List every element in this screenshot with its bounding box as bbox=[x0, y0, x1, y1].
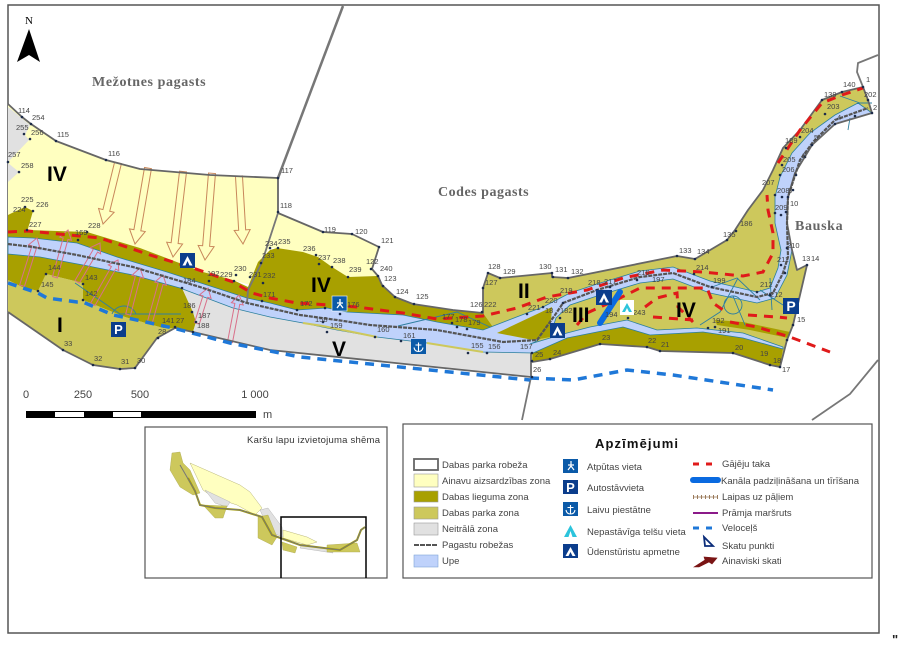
survey point numbers: 184 bbox=[183, 276, 196, 285]
legend: reserve zone: Dabas lieguma zona bbox=[442, 492, 529, 503]
survey point numbers: 228 bbox=[88, 221, 101, 230]
survey point numbers: 254 bbox=[32, 113, 45, 122]
survey point numbers: 197 bbox=[652, 275, 665, 284]
survey point numbers: 33 bbox=[64, 339, 72, 348]
survey point numbers: 189 bbox=[785, 136, 798, 145]
survey point numbers: 20 bbox=[735, 343, 743, 352]
survey point numbers: 211 bbox=[777, 255, 789, 264]
survey point numbers: 186 bbox=[183, 301, 196, 310]
survey point numbers: 239 bbox=[349, 265, 362, 274]
survey point numbers: 125 bbox=[416, 292, 429, 301]
survey point numbers: 13 bbox=[802, 254, 810, 263]
survey point numbers: 145 bbox=[41, 280, 54, 289]
legend: viewpoints bbox=[704, 537, 774, 552]
zone numerals: IV bbox=[47, 163, 67, 186]
legend: cycle route: Veloceļš bbox=[722, 523, 758, 534]
legend: landscape zone: Ainavu aizsardzības zona bbox=[442, 476, 551, 487]
inset extent rectangle bbox=[281, 517, 366, 578]
survey point numbers: 212 bbox=[770, 290, 783, 299]
survey point numbers: 188 bbox=[197, 321, 210, 330]
icon: water tourist camp west bbox=[550, 323, 565, 338]
survey point numbers: 21 bbox=[661, 340, 669, 349]
survey point numbers: 6 bbox=[802, 151, 806, 160]
inset mini map bbox=[170, 452, 365, 553]
survey point numbers: 226 bbox=[36, 200, 49, 209]
legend: park zone: Dabas parka zona bbox=[442, 508, 520, 519]
survey point numbers: 132 bbox=[571, 267, 584, 276]
survey point numbers: 207 bbox=[762, 178, 775, 187]
survey point numbers: 208 bbox=[777, 186, 790, 195]
survey point numbers: 158 bbox=[315, 315, 328, 324]
survey point numbers: 123 bbox=[384, 274, 397, 283]
zone numerals: I bbox=[57, 314, 63, 337]
survey point numbers: 129 bbox=[503, 267, 516, 276]
cycle route east bbox=[530, 370, 773, 390]
legend: water tourist camp: Ūdenstūristu apmetne bbox=[587, 547, 680, 558]
footpath loop c bbox=[653, 317, 693, 320]
survey point numbers: 143 bbox=[85, 273, 98, 282]
north letter: N bbox=[25, 15, 33, 27]
survey point numbers: 17 bbox=[782, 365, 790, 374]
zone: reserve island bbox=[497, 307, 552, 340]
scale labels: 0 bbox=[23, 389, 29, 401]
survey point numbers: 116 bbox=[108, 149, 120, 158]
legend: parking: Autostāvvieta bbox=[587, 483, 645, 494]
survey point numbers: 235 bbox=[278, 237, 291, 246]
inset frame bbox=[145, 427, 387, 578]
zone: landscape protection west bbox=[8, 104, 278, 285]
inset title: Karšu lapu izvietojuma shēma bbox=[247, 435, 381, 446]
survey point numbers: 160 bbox=[377, 325, 390, 334]
survey point numbers: 120 bbox=[355, 227, 368, 236]
survey point numbers: 176 bbox=[347, 300, 360, 309]
survey point numbers: 8 bbox=[788, 186, 792, 195]
legend frame bbox=[403, 424, 872, 578]
survey point numbers: 25 bbox=[535, 350, 543, 359]
survey point numbers: 131 bbox=[555, 265, 568, 274]
survey point numbers: 134 bbox=[697, 247, 710, 256]
survey point numbers: 141 bbox=[162, 316, 175, 325]
viewpoint circle bbox=[724, 296, 742, 314]
river: main channel bbox=[8, 103, 872, 353]
survey point numbers: 186 bbox=[740, 219, 753, 228]
legend: viewpoints: Skatu punkti bbox=[722, 541, 774, 552]
legend: canal: Kanāla padziļināšana un tīrīšana bbox=[721, 476, 860, 487]
survey point numbers: 18 bbox=[773, 356, 781, 365]
survey point numbers: 209 bbox=[775, 203, 788, 212]
zone: reserve south strip bbox=[532, 327, 783, 367]
survey point numbers: 4 bbox=[837, 113, 841, 122]
viewpoint far east bbox=[840, 96, 872, 130]
survey point dots bbox=[8, 87, 872, 377]
place names: Mežotnes pagasts bbox=[92, 75, 206, 90]
zone numerals: IV bbox=[676, 299, 696, 322]
survey point numbers: 161 bbox=[403, 331, 416, 340]
survey point numbers: 128 bbox=[488, 262, 501, 271]
place names: Bauska bbox=[795, 219, 843, 234]
survey point numbers: 27 bbox=[176, 316, 184, 325]
survey point numbers: 19 bbox=[760, 349, 768, 358]
icon: parking west bbox=[111, 322, 126, 337]
scale bar bbox=[23, 389, 272, 421]
survey point numbers: 32 bbox=[94, 354, 102, 363]
survey point numbers: 159 bbox=[330, 321, 343, 330]
legend column: zones bbox=[414, 459, 551, 567]
survey point numbers: 23 bbox=[602, 333, 610, 342]
inset map panel bbox=[145, 427, 387, 578]
survey point numbers: 210 bbox=[787, 241, 800, 250]
survey point numbers: 135 bbox=[723, 230, 736, 239]
scale labels: 250 bbox=[74, 389, 92, 401]
survey point numbers: 199 bbox=[713, 276, 726, 285]
survey point numbers: 5 bbox=[814, 133, 818, 142]
survey point numbers: 169 bbox=[75, 228, 88, 237]
scale labels: 1 000 bbox=[241, 389, 269, 401]
survey point numbers: 14 bbox=[811, 254, 819, 263]
legend: rest place: Atpūtas vieta bbox=[587, 462, 643, 473]
survey point numbers: 119 bbox=[324, 225, 336, 234]
municipal line north bbox=[278, 6, 343, 178]
scenic arrows bbox=[16, 161, 251, 343]
survey point numbers: 31 bbox=[121, 357, 129, 366]
survey point numbers: 217 bbox=[604, 277, 617, 286]
survey point numbers: 258 bbox=[21, 161, 34, 170]
survey point numbers: 130 bbox=[539, 262, 552, 271]
survey point numbers: 172 bbox=[300, 299, 313, 308]
canal deepening bbox=[600, 292, 620, 323]
survey point numbers: 115 bbox=[57, 130, 69, 139]
legend: scenic views: Ainaviski skati bbox=[722, 556, 782, 567]
footpaths bbox=[8, 88, 863, 352]
footpath north bank bbox=[8, 195, 773, 319]
icon: parking west: P bbox=[114, 322, 123, 337]
survey point numbers: 140 bbox=[843, 80, 856, 89]
survey point numbers: 182 bbox=[560, 306, 573, 315]
survey point numbers: 192 bbox=[207, 269, 220, 278]
arrows to the south bbox=[95, 161, 251, 261]
legend title: Apzīmējumi bbox=[595, 436, 678, 451]
zone: park zone east bbox=[483, 87, 872, 367]
footpath east exit bbox=[730, 322, 830, 352]
legend: boat landing: Laivu piestātne bbox=[587, 505, 651, 516]
scale unit: m bbox=[263, 409, 272, 421]
survey point numbers: 22 bbox=[648, 336, 656, 345]
zone: park zone I bbox=[8, 274, 175, 369]
survey point numbers: 118 bbox=[280, 201, 292, 210]
icon: parking east bbox=[783, 298, 799, 314]
north arrow bbox=[17, 15, 40, 62]
survey point numbers: 238 bbox=[333, 256, 346, 265]
survey point numbers: 114 bbox=[18, 106, 30, 115]
north pointer bbox=[17, 29, 40, 62]
legend: neutral zone: Neitrālā zona bbox=[442, 524, 499, 535]
footpath loop a bbox=[577, 288, 723, 325]
survey point numbers: 243 bbox=[633, 308, 646, 317]
survey point numbers: 255 bbox=[16, 123, 29, 132]
arrows to the north bbox=[16, 228, 245, 343]
scale segments bbox=[26, 411, 256, 418]
zone numerals bbox=[47, 163, 696, 361]
survey point numbers: 233 bbox=[262, 251, 275, 260]
survey point numbers: 231 bbox=[249, 270, 262, 279]
survey point numbers: 257 bbox=[8, 150, 21, 159]
survey point numbers: 218 bbox=[588, 278, 601, 287]
survey point numbers: 157 bbox=[520, 342, 533, 351]
survey point numbers: 117 bbox=[281, 166, 293, 175]
footpath loop b bbox=[645, 293, 693, 322]
cycle route west bbox=[8, 283, 530, 380]
zone: reserve south bank bbox=[8, 254, 196, 332]
survey point numbers: 204 bbox=[801, 126, 814, 135]
survey point numbers bbox=[8, 75, 877, 374]
zone: neutral V bbox=[182, 288, 531, 377]
icon: rest place bbox=[332, 296, 347, 311]
view lines bbox=[75, 96, 872, 327]
survey point numbers: 227 bbox=[29, 220, 42, 229]
survey point numbers: 230 bbox=[234, 264, 247, 273]
survey point numbers: 24 bbox=[553, 348, 561, 357]
viewpoint middle bbox=[398, 312, 490, 327]
survey point numbers: 156 bbox=[488, 342, 501, 351]
legend: scenic views bbox=[694, 556, 782, 567]
legend: river: Upe bbox=[442, 556, 459, 567]
boundaries bbox=[8, 6, 878, 420]
place names bbox=[92, 75, 843, 234]
survey point numbers: 126 bbox=[470, 300, 483, 309]
survey point numbers: 124 bbox=[396, 287, 409, 296]
legend: parking bbox=[563, 480, 645, 495]
survey point numbers: 214 bbox=[696, 263, 709, 272]
survey point numbers: 127 bbox=[485, 278, 498, 287]
survey point numbers: 240 bbox=[380, 264, 393, 273]
survey point numbers: 219 bbox=[560, 286, 573, 295]
park boundary west bbox=[8, 87, 872, 367]
survey point numbers: 142 bbox=[85, 289, 98, 298]
legend: ferry route: Prāmja maršruts bbox=[722, 508, 792, 519]
viewpoint east tangle bbox=[700, 278, 783, 325]
scale labels bbox=[23, 389, 269, 401]
icon: temporary tent site bbox=[620, 300, 634, 315]
footpath bend bbox=[778, 88, 863, 163]
park boundary south bbox=[8, 312, 531, 377]
survey point numbers: 187 bbox=[198, 311, 211, 320]
survey point numbers: 236 bbox=[303, 244, 316, 253]
survey point numbers: 202 bbox=[864, 90, 877, 99]
legend column: routes bbox=[693, 459, 860, 567]
survey point numbers: 26 bbox=[533, 365, 541, 374]
legend: footpath: Gājēju taka bbox=[722, 459, 771, 470]
zone numerals: V bbox=[332, 338, 346, 361]
survey point numbers: 28 bbox=[158, 327, 166, 336]
survey point numbers: 179 bbox=[468, 318, 481, 327]
survey point numbers: 177 bbox=[442, 312, 455, 321]
survey point numbers: 1 bbox=[866, 75, 870, 84]
survey point numbers: 225 bbox=[21, 195, 34, 204]
viewpoint west bbox=[75, 283, 181, 314]
legend: cycle route bbox=[693, 523, 758, 534]
scale labels: 500 bbox=[131, 389, 149, 401]
survey point numbers: 220 bbox=[545, 296, 558, 305]
footpath loop d bbox=[748, 315, 787, 318]
survey point numbers: 234 bbox=[265, 239, 278, 248]
legend: footpath bbox=[693, 459, 771, 470]
river: island cover bbox=[497, 307, 552, 340]
survey point numbers: 205 bbox=[783, 155, 796, 164]
zone numerals: II bbox=[518, 280, 530, 303]
survey point numbers: 237 bbox=[318, 253, 331, 262]
survey point numbers: 203 bbox=[827, 102, 840, 111]
river: sand strips bbox=[303, 323, 483, 352]
survey point numbers: 139 bbox=[824, 90, 837, 99]
zone numerals: IV bbox=[311, 274, 331, 297]
survey point numbers: 30 bbox=[137, 356, 145, 365]
legend: temporary tent site: Nepastāvīga telšu vieta bbox=[587, 527, 686, 538]
survey point numbers: 144 bbox=[48, 263, 61, 272]
survey point numbers: 178 bbox=[455, 315, 468, 324]
cycle route bbox=[8, 283, 773, 390]
survey point numbers: 10 bbox=[790, 199, 798, 208]
legend panel bbox=[403, 424, 872, 578]
zone: landscape protection middle bbox=[270, 213, 379, 277]
survey point numbers: 212 bbox=[760, 280, 773, 289]
zone numerals: III bbox=[572, 304, 590, 327]
legend: parking: P bbox=[566, 480, 575, 495]
survey point numbers: 229 bbox=[220, 270, 233, 279]
survey point numbers: 222 bbox=[484, 300, 497, 309]
survey point numbers: 224 bbox=[13, 205, 26, 214]
map icons bbox=[111, 253, 799, 354]
municipal boundary along river bbox=[8, 108, 868, 342]
legend column: facilities bbox=[563, 459, 686, 558]
municipal boundary lines bbox=[247, 55, 878, 420]
icon: parking east: P bbox=[786, 298, 796, 314]
survey point numbers: 192 bbox=[712, 316, 725, 325]
survey point numbers: 133 bbox=[679, 246, 692, 255]
survey point numbers: 121 bbox=[381, 236, 394, 245]
zone: reserve left blob bbox=[8, 207, 33, 232]
zone: reserve east strip bbox=[715, 320, 790, 338]
survey point numbers: 122 bbox=[366, 257, 379, 266]
icon: boat landing bbox=[411, 339, 426, 354]
survey point numbers: 18 bbox=[545, 306, 553, 315]
legend: park boundary: Dabas parka robeža bbox=[442, 460, 528, 471]
survey point numbers: 232 bbox=[263, 271, 276, 280]
survey point numbers: 216 bbox=[637, 268, 650, 277]
legend: municipal boundaries: Pagastu robežas bbox=[442, 540, 514, 551]
survey point numbers: 194 bbox=[605, 310, 618, 319]
survey point numbers: 206 bbox=[782, 165, 795, 174]
survey point numbers: 171 bbox=[263, 290, 276, 299]
survey point numbers: 221 bbox=[528, 303, 541, 312]
map: zones bbox=[8, 87, 872, 377]
place names: Codes pagasts bbox=[438, 185, 529, 200]
survey point numbers: 2 bbox=[873, 103, 877, 112]
icon: water tourist camp east bbox=[596, 290, 612, 305]
survey point numbers: 256 bbox=[31, 128, 44, 137]
zone: reserve north bank bbox=[8, 230, 552, 340]
survey point numbers: 191 bbox=[718, 326, 731, 335]
survey point numbers: 15 bbox=[797, 315, 805, 324]
zone: neutral north-west bbox=[8, 107, 30, 182]
legend: footbridges: Laipas uz pāļiem bbox=[722, 492, 793, 503]
survey point numbers: 155 bbox=[471, 341, 484, 350]
icon: campsite bbox=[180, 253, 195, 268]
